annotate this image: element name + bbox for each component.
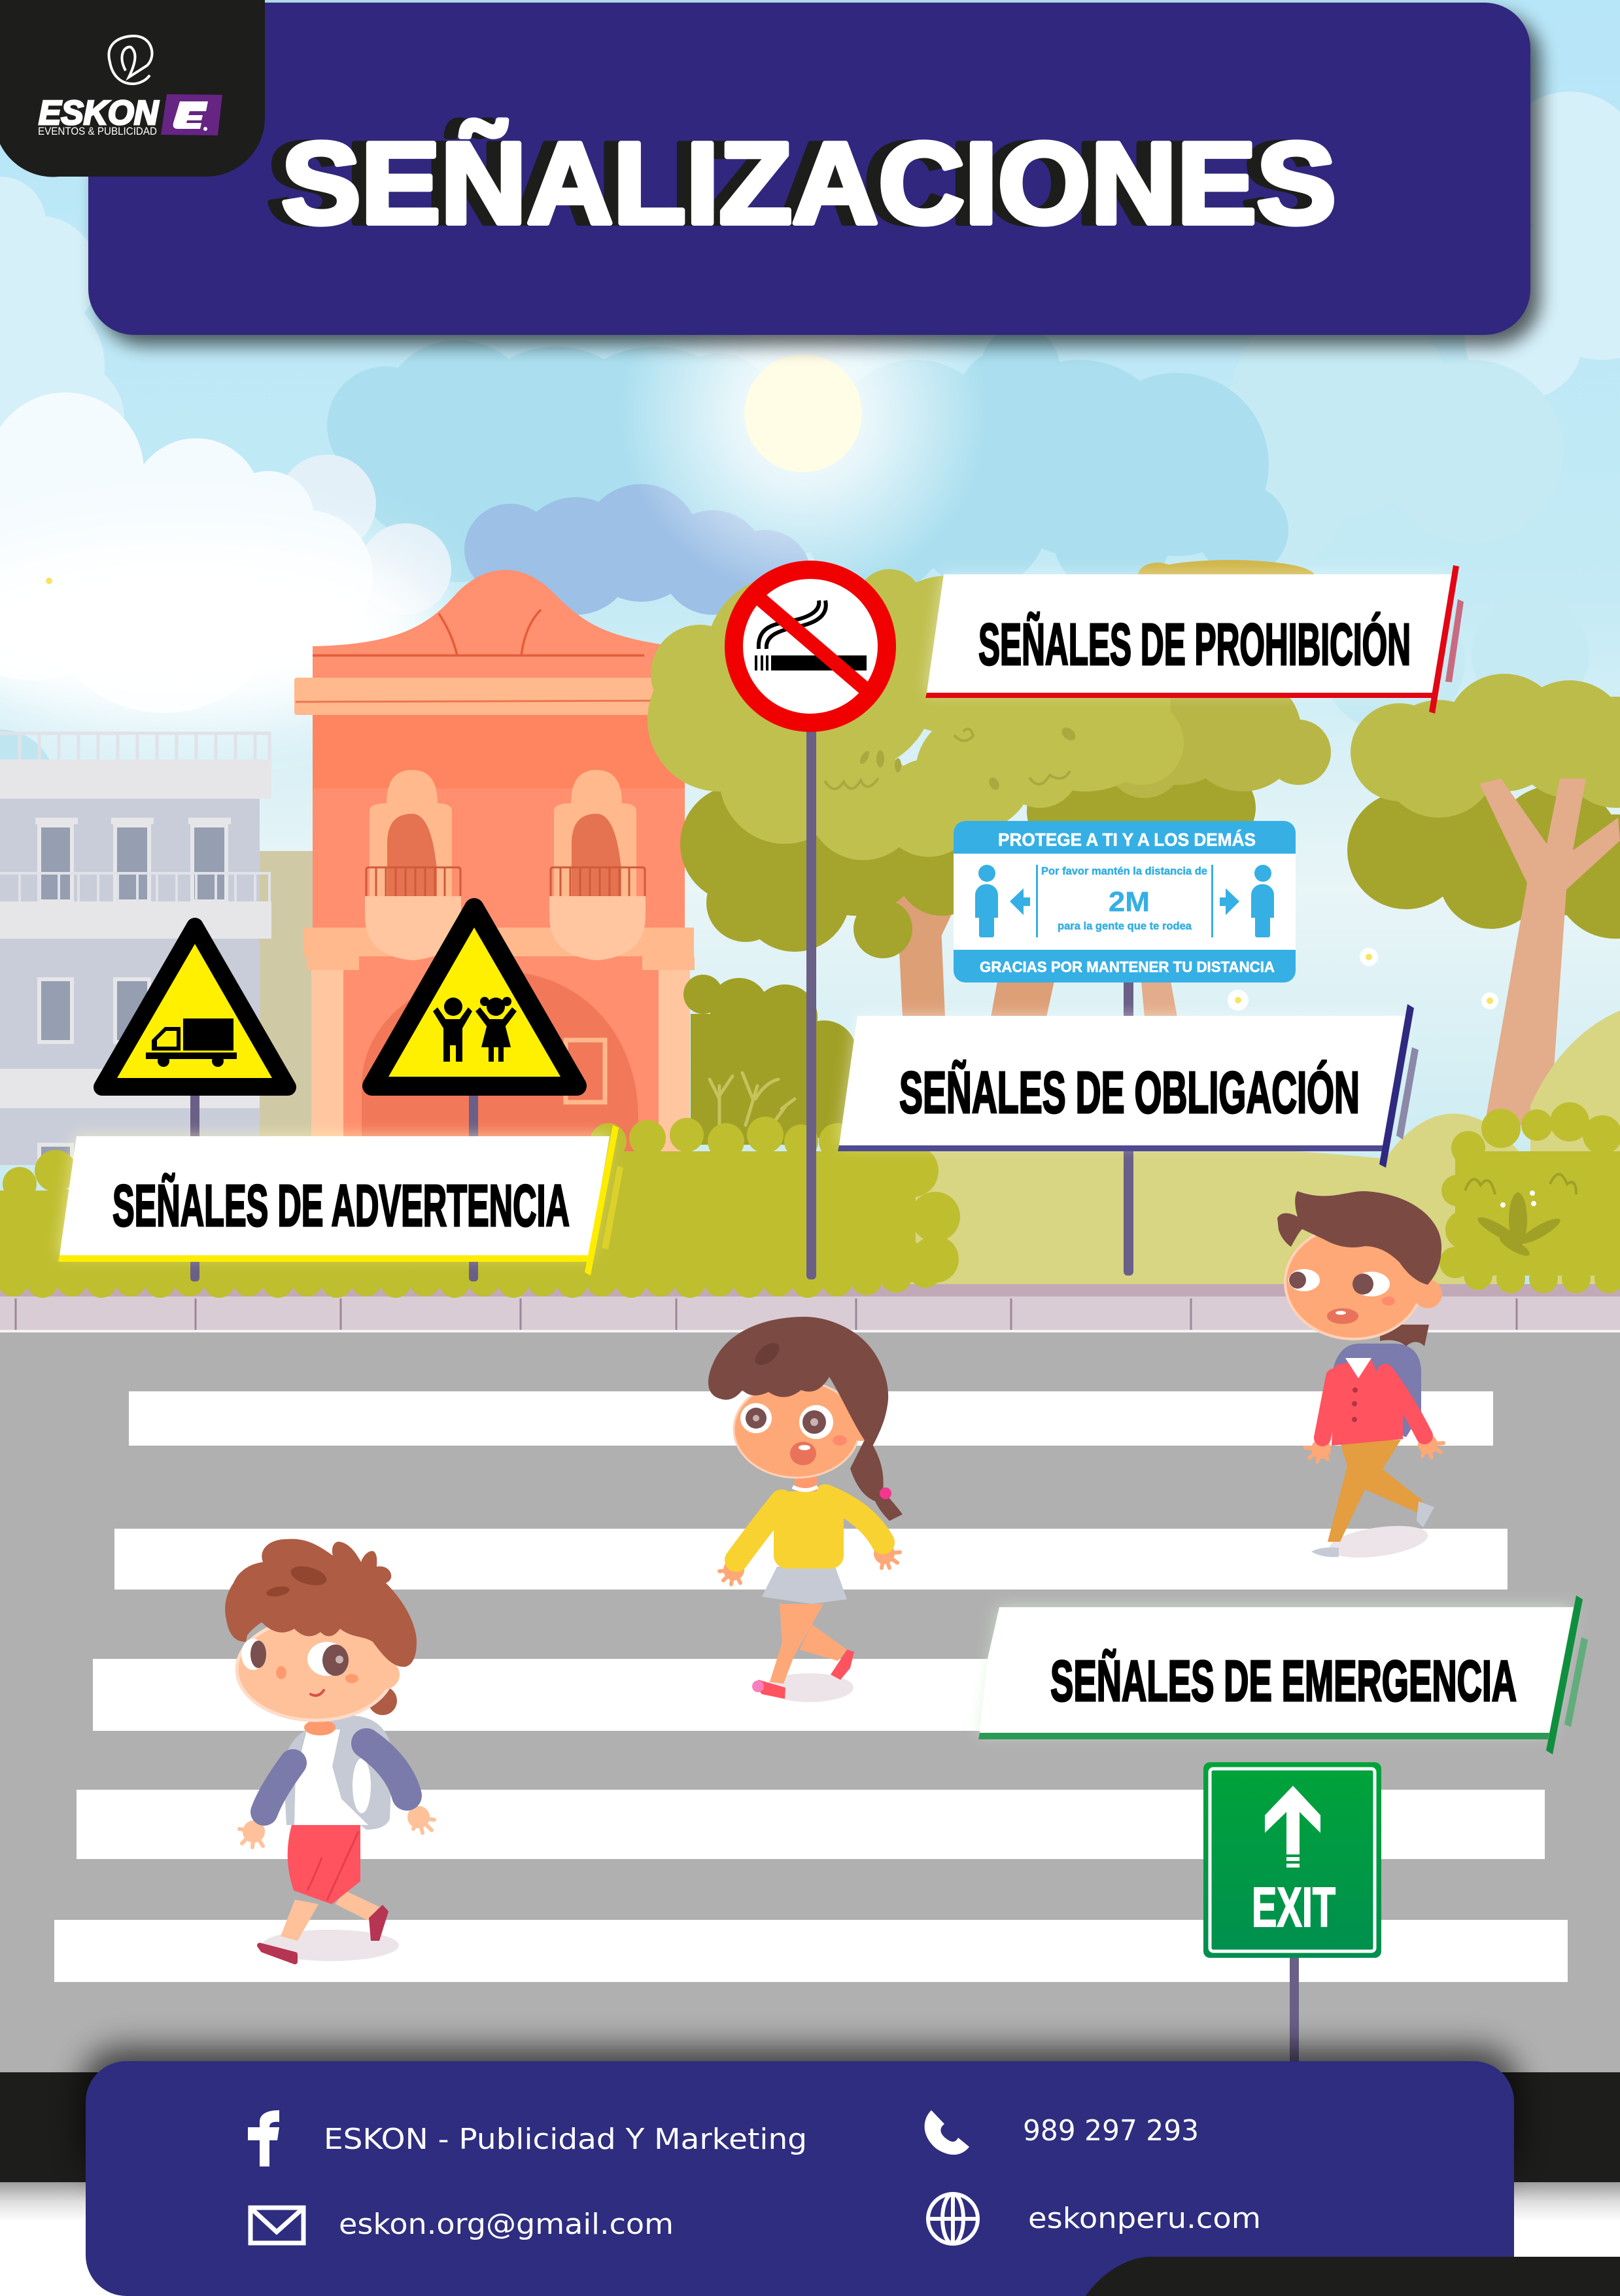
icon: person right: [1251, 865, 1274, 937]
sky background: [0, 0, 1620, 1308]
building: orange: [294, 570, 695, 1161]
icon: person left: [975, 865, 998, 937]
phone text: 989 297 293: [1023, 2114, 1199, 2148]
no-smoking sign: [734, 570, 887, 723]
logo tagline: EVENTOS & PUBLICIDAD: [38, 125, 157, 137]
hedge: left and centre: [0, 1117, 960, 1283]
balcony window right: [549, 770, 646, 960]
boy hands: [1305, 1436, 1443, 1462]
distance sign: para la gente que te rodea: [1058, 920, 1192, 932]
label: prohibición: [925, 565, 1464, 714]
logo panel: [0, 0, 265, 177]
band lower shade: [0, 2182, 1620, 2221]
building: grey: [0, 733, 271, 1171]
exit sign: [1203, 1762, 1381, 2067]
web text: eskonperu.com: [1028, 2202, 1261, 2235]
facebook text: ESKON - Publicidad Y Marketing: [324, 2123, 807, 2156]
boy with red shorts: [225, 1539, 434, 1962]
poles of signs: [190, 726, 1133, 1281]
footer shadow: [82, 2047, 1518, 2178]
mail text: eskon.org@gmail.com: [339, 2208, 674, 2241]
exit sign: EXIT: [1252, 1877, 1336, 1939]
tree: foliage doodles: [825, 729, 1069, 789]
title: SEÑALIZACIONES: [267, 118, 1322, 248]
distance sign: [954, 821, 1296, 983]
title: SEÑALIZACIONES: [281, 118, 1336, 248]
header shadow: [98, 13, 1540, 345]
icon: globe: [928, 2194, 978, 2244]
boy hands: [239, 1808, 434, 1847]
clouds: white left: [0, 392, 373, 713]
clouds: pale background right: [1203, 294, 1589, 733]
distance sign: Por favor mantén la distancia de: [1041, 865, 1207, 877]
clouds: blue centre: [327, 327, 1288, 595]
header panel: [88, 3, 1530, 335]
logo badge: [161, 94, 222, 135]
label: obligación: [838, 1004, 1419, 1168]
logo wordmark: ESKON: [39, 94, 159, 132]
label: advertencia: SEÑALES DE ADVERTENCIA: [112, 1173, 570, 1239]
crosswalk stripes: [54, 1391, 1568, 1982]
icon: cigarette: [756, 600, 867, 670]
girl hands: [719, 1545, 900, 1584]
icon: arrow up: [1265, 1786, 1320, 1868]
hedge: scalloped bottom: [0, 1257, 941, 1298]
backpack: [330, 1715, 392, 1830]
clouds: deeper blue: [464, 484, 811, 621]
white haze left: [0, 530, 445, 726]
balcony window left: [365, 770, 461, 960]
building: tan wall behind: [260, 851, 319, 1152]
road: [0, 1332, 1620, 2072]
sidewalk: [0, 1284, 1620, 1332]
bush: dark behind hedge: [683, 975, 873, 1145]
warning sign: truck: [102, 926, 288, 1087]
icon: arrow left: [1010, 888, 1030, 915]
sun glow: [620, 230, 986, 597]
tree: second crown: [1105, 595, 1331, 798]
logo swirl: [109, 36, 152, 84]
sun: [744, 355, 862, 472]
tree: left trunks: [893, 785, 1210, 1017]
label: emergencia: [978, 1595, 1588, 1754]
warning sign: children: [372, 908, 577, 1086]
tree: gold highlights above label: [1138, 560, 1315, 591]
icon: phone: [925, 2110, 969, 2155]
tree: dark foliage left: [680, 759, 1256, 958]
sign top band: [954, 821, 1296, 854]
icon: facebook: [248, 2110, 279, 2166]
girl walking: [708, 1317, 903, 1702]
bush: right: [1439, 1102, 1620, 1293]
icon: truck: [146, 1018, 237, 1067]
label: advertencia: [58, 1125, 623, 1276]
sign bottom band: [954, 950, 1296, 983]
boy with blue backpack: [1277, 1191, 1443, 1563]
icon: children: [433, 997, 517, 1062]
far pale blue cloud behind buildings: [0, 729, 56, 841]
footer panel: [86, 2061, 1514, 2296]
distance sign: PROTEGE A TI Y A LOS DEMÁS: [998, 829, 1256, 850]
tree: main lime crown: [647, 569, 1184, 860]
distance sign: GRACIAS POR MANTENER TU DISTANCIA: [980, 958, 1275, 975]
flowers: [46, 578, 1498, 1011]
icon: arrow right: [1220, 888, 1239, 915]
bush doodle: [710, 1073, 795, 1125]
cloud shading left: [278, 455, 451, 615]
footer black tab: [1086, 2257, 1620, 2296]
black band: [0, 2072, 1620, 2182]
tree: right crown: [1347, 674, 1620, 1125]
hills: [831, 1011, 1620, 1284]
distance sign: 2M: [1109, 886, 1150, 918]
icon: mail: [250, 2208, 303, 2243]
clouds: white top right and left: [0, 92, 1620, 478]
